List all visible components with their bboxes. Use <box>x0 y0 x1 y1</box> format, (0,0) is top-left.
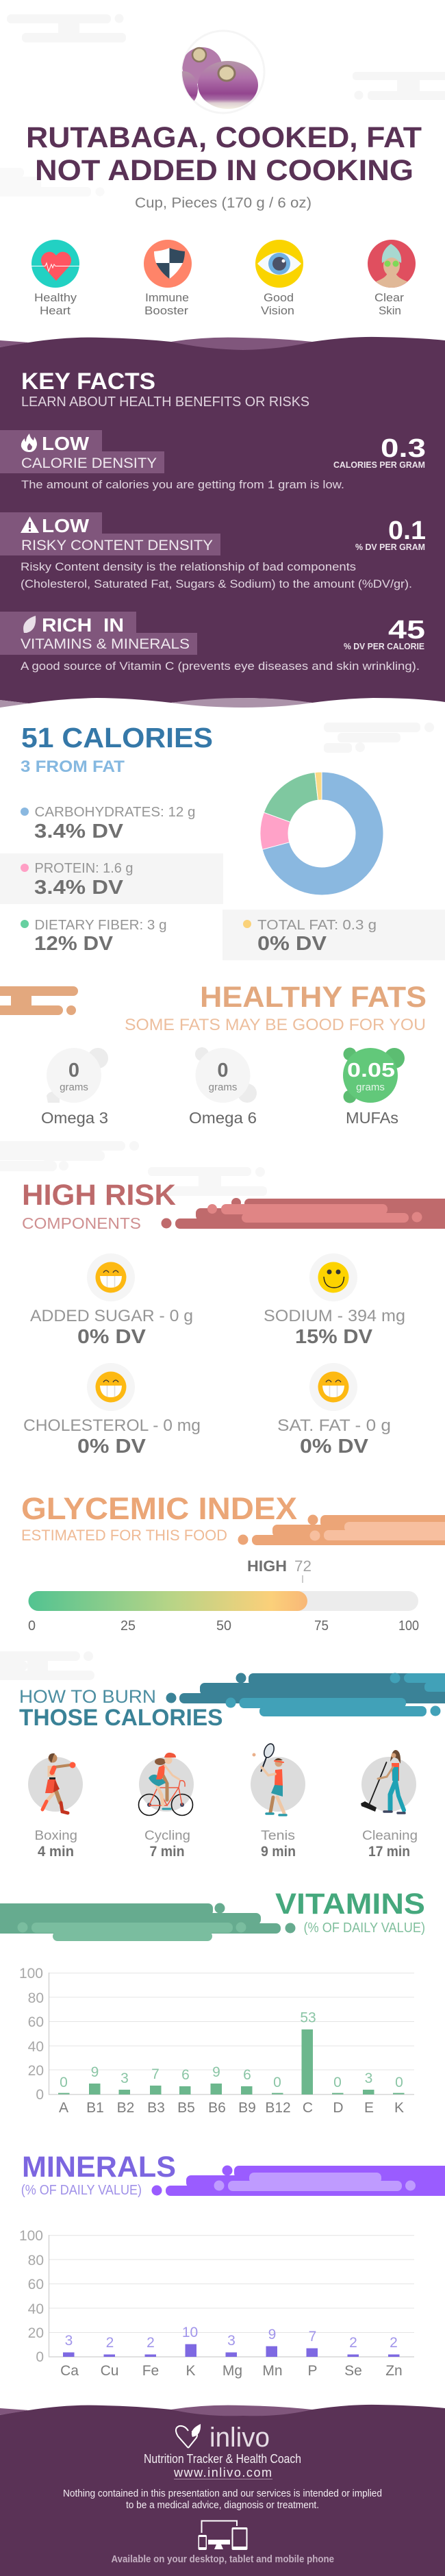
bar chart: vitamins: 3 <box>120 2071 129 2086</box>
icon: eye <box>255 240 303 288</box>
heading: key facts: KEY FACTS <box>21 368 155 395</box>
banner shape: green <box>0 1903 296 1941</box>
bar chart: vitamins: C <box>303 2100 313 2116</box>
benefit: clear skin: Skin <box>379 304 401 317</box>
gauge scale: 0 <box>28 1618 36 1634</box>
panel: key facts <box>0 337 445 708</box>
bar chart: minerals: 10 <box>182 2325 198 2340</box>
risk: cholesterol: 0% DV <box>77 1436 147 1458</box>
serving size: Cup, Pieces (170 g / 6 oz) <box>135 195 312 211</box>
bar chart: vitamins: K <box>394 2100 404 2116</box>
background cloud: burn <box>0 1651 94 1680</box>
icon: grin <box>96 1371 126 1403</box>
icon: shield <box>144 240 192 288</box>
title <box>26 121 422 187</box>
heading: healthy fats: HEALTHY FATS <box>200 981 427 1014</box>
activity: cycling <box>138 1753 194 1860</box>
stat: omega 6: Omega 6 <box>189 1109 257 1127</box>
title: NOT ADDED IN COOKING <box>35 154 414 187</box>
banner shape: teal <box>166 1673 445 1716</box>
bar chart: vitamins: E <box>364 2100 374 2116</box>
benefit: good vision: Vision <box>261 304 294 317</box>
benefit: clear skin <box>368 240 416 317</box>
gauge scale: 100 <box>398 1618 419 1634</box>
fact: risky content density: Risky Content density is the relationship of bad components <box>21 560 356 573</box>
icon: face mask <box>368 240 416 288</box>
fact: risky content density: RISKY CONTENT DENSITY <box>21 538 213 553</box>
panel: how to burn those calories <box>19 1673 445 1860</box>
bar chart: vitamins: 7 <box>151 2066 160 2082</box>
banner shape: purple <box>152 2166 445 2196</box>
legend: protein: PROTEIN: 1.6 g <box>34 861 133 876</box>
activity: cycling: 7 min <box>149 1844 185 1860</box>
stat: omega 3: 0 <box>68 1060 79 1081</box>
heading: HOW TO BURN <box>19 1686 156 1707</box>
bar chart: minerals: 3 <box>227 2333 236 2349</box>
bar chart: minerals: Se <box>344 2363 362 2379</box>
risk: sodium: SODIUM - 394 mg <box>264 1307 405 1325</box>
activity: cleaning: 17 min <box>368 1844 410 1860</box>
bar chart: minerals: 2 <box>147 2335 155 2351</box>
stat: MUFAs <box>343 1048 405 1127</box>
risk: saturated fat: 0% DV <box>300 1436 369 1458</box>
fact: calorie density: The amount of calories you are getting from 1 gram is low. <box>21 478 344 491</box>
background cloud: calories <box>324 723 434 753</box>
gauge scale: 50 <box>216 1618 231 1634</box>
bar chart: minerals <box>19 2228 414 2379</box>
bar chart: minerals: 80 <box>28 2253 44 2268</box>
fact: risky content density: LOW <box>42 515 90 536</box>
risk: sodium <box>264 1253 405 1348</box>
bar chart: minerals: Fe <box>142 2363 159 2379</box>
stat: MUFAs: 0.05 <box>347 1060 395 1081</box>
bar chart: minerals: 20 <box>28 2325 44 2341</box>
bar chart: vitamins: 53 <box>300 2010 316 2026</box>
icon: tennis player <box>252 1742 286 1815</box>
bar chart: vitamins: 40 <box>28 2039 44 2055</box>
bar chart: vitamins: B6 <box>208 2100 226 2116</box>
bar chart: vitamins: D <box>333 2100 344 2116</box>
stat: omega 6: grams <box>209 1081 237 1093</box>
legend: carbohydrates: CARBOHYDRATES: 12 g <box>34 805 196 820</box>
risk: sodium: 15% DV <box>295 1326 373 1348</box>
bar chart: vitamins: 0 <box>60 2075 68 2090</box>
fact: calorie density: 0.3 <box>381 434 426 463</box>
risk: saturated fat: SAT. FAT - 0 g <box>277 1416 391 1435</box>
availability note: Available on your desktop, tablet and mobile phone <box>111 2553 334 2565</box>
bar chart: vitamins: 0 <box>395 2075 403 2090</box>
food photo: rutabaga <box>169 31 264 113</box>
bar chart: minerals: 3 <box>65 2333 73 2349</box>
panel: minerals <box>19 2151 445 2379</box>
legend: total fat <box>243 918 377 955</box>
bar chart: vitamins: 9 <box>91 2064 99 2080</box>
icon: grin <box>318 1371 349 1403</box>
stat: MUFAs: grams <box>356 1081 385 1093</box>
subheading: SOME FATS MAY BE GOOD FOR YOU <box>125 1016 426 1034</box>
icon: person sweeping <box>361 1750 405 1813</box>
bar chart: vitamins: 60 <box>28 2014 44 2030</box>
legend: total fat: 0% DV <box>257 933 327 955</box>
benefit: good vision <box>255 240 303 317</box>
bar chart: vitamins: 0 <box>36 2087 44 2103</box>
benefit: immune booster: Immune <box>145 291 189 304</box>
legend: carbohydrates <box>21 805 196 842</box>
gauge scale <box>28 1618 419 1634</box>
icon: devices <box>199 2521 248 2550</box>
bar chart: minerals: 7 <box>309 2329 316 2344</box>
risk: added sugar <box>30 1253 193 1348</box>
panel: calories <box>0 722 445 960</box>
stat: omega 3 <box>41 1048 108 1127</box>
heading: glycemic index: GLYCEMIC INDEX <box>21 1491 297 1526</box>
bar chart: minerals: Cu <box>101 2363 118 2379</box>
benefit: immune booster: Booster <box>144 304 188 317</box>
fact: rich in vitamins and minerals: A good source of Vitamin C (prevents eye diseases and skin wrinkling). <box>21 660 420 673</box>
panel: vitamins <box>0 1888 425 2116</box>
gauge label: high 72: HIGH <box>247 1558 287 1575</box>
disclaimer: to be a medical advice, diagnosis or treatment. <box>126 2499 319 2511</box>
fact: calorie density: CALORIES PER GRAM <box>333 460 425 470</box>
risk: cholesterol: CHOLESTEROL - 0 mg <box>23 1416 201 1435</box>
bar chart: minerals: 60 <box>28 2277 44 2292</box>
panel: footer <box>0 2405 445 2576</box>
fact: calorie density <box>0 430 426 491</box>
fact: rich in vitamins and minerals: RICH IN <box>42 614 124 636</box>
legend: total fat: TOTAL FAT: 0.3 g <box>257 918 377 933</box>
bar chart: vitamins: B9 <box>238 2100 256 2116</box>
bar chart: minerals: 2 <box>106 2335 114 2351</box>
icon: warning <box>21 516 39 533</box>
activity: boxing: 4 min <box>38 1844 74 1860</box>
bar chart: vitamins: 6 <box>181 2067 190 2083</box>
legend: dietary fiber: 12% DV <box>34 933 114 955</box>
fact: risky content density: % DV PER GRAM <box>355 542 425 552</box>
bar chart: vitamins: B1 <box>86 2100 104 2116</box>
bar chart: minerals: Zn <box>385 2363 403 2379</box>
bar chart: vitamins: B5 <box>177 2100 195 2116</box>
tagline: Nutrition Tracker & Health Coach <box>144 2452 301 2466</box>
legend: dietary fiber <box>21 918 167 955</box>
risk: saturated fat <box>277 1363 391 1458</box>
activity: cleaning: Cleaning <box>362 1829 418 1843</box>
donut chart <box>260 772 383 895</box>
legend: protein <box>21 861 133 899</box>
bar chart: minerals: K <box>186 2363 196 2379</box>
heading: vitamins: VITAMINS <box>275 1888 425 1921</box>
subheading: LEARN ABOUT HEALTH BENEFITS OR RISKS <box>21 395 309 410</box>
panel: healthy fats <box>0 981 427 1127</box>
bar chart: minerals: Ca <box>60 2363 79 2379</box>
icon: grin <box>96 1262 126 1293</box>
bar chart: minerals: 100 <box>19 2228 43 2244</box>
bar chart: minerals: Mg <box>222 2363 242 2379</box>
bar chart: minerals: 9 <box>268 2327 276 2342</box>
fact: risky content density: 0.1 <box>388 516 426 545</box>
banner shape: red <box>162 1198 445 1229</box>
subheading: ESTIMATED FOR THIS FOOD <box>21 1527 227 1544</box>
fact: risky content density <box>0 512 426 590</box>
activity: cleaning <box>361 1750 418 1860</box>
bar chart: vitamins: 9 <box>212 2064 220 2080</box>
bar chart: minerals: Mn <box>262 2363 283 2379</box>
fact: risky content density: (Cholesterol, Saturated Fat, Sugars & Sodium) to the amount (%DV/gr). <box>21 577 412 590</box>
bar chart: vitamins: A <box>59 2100 68 2116</box>
bar chart: vitamins: 80 <box>28 1990 44 2006</box>
panel: glycemic index <box>21 1491 445 1634</box>
bar chart: minerals: 0 <box>36 2349 44 2365</box>
heading: calories: 51 CALORIES <box>21 722 213 753</box>
heading: high risk: HIGH RISK <box>22 1179 176 1212</box>
bar chart: minerals: 40 <box>28 2301 44 2317</box>
activity: boxing <box>28 1753 83 1860</box>
heading: THOSE CALORIES <box>19 1705 223 1731</box>
bar chart: vitamins: 20 <box>28 2063 44 2079</box>
website: www.inlivo.com <box>173 2466 272 2479</box>
bar chart: vitamins: 0 <box>333 2075 342 2090</box>
logo: inlivo heart <box>176 2424 201 2448</box>
subheading: components: COMPONENTS <box>22 1214 141 1232</box>
bar chart: vitamins: 6 <box>243 2067 251 2083</box>
background cloud: top right <box>353 72 445 100</box>
fact: calorie density: LOW <box>42 433 90 454</box>
gauge label: high 72 <box>247 1558 312 1583</box>
activity: tennis: 9 min <box>261 1844 296 1860</box>
icon: heart <box>31 240 79 288</box>
activity: tennis <box>251 1742 305 1860</box>
heading: minerals: MINERALS <box>22 2151 176 2184</box>
icon: cyclist <box>138 1753 193 1815</box>
fact: rich in vitamins and minerals: VITAMINS & MINERALS <box>21 636 190 652</box>
background cloud: high risk <box>0 1141 267 1196</box>
bar chart: vitamins: 0 <box>273 2075 281 2090</box>
gauge scale: 25 <box>120 1618 136 1634</box>
fact: calorie density: CALORIE DENSITY <box>21 455 157 471</box>
gauge scale: 75 <box>314 1618 329 1634</box>
gauge bar <box>29 1591 418 1611</box>
title: RUTABAGA, COOKED, FAT <box>26 121 422 154</box>
bar chart: minerals: P <box>307 2363 318 2379</box>
bar chart: vitamins: 100 <box>19 1966 43 1981</box>
heading <box>19 1686 223 1731</box>
icon: leaf <box>23 616 36 633</box>
icon: boxer <box>42 1753 75 1813</box>
subheading: (% OF DAILY VALUE) <box>304 1921 425 1936</box>
icon: flame <box>21 434 37 452</box>
banner shape: orange <box>238 1515 445 1545</box>
gauge label: high 72: 72 <box>294 1558 312 1575</box>
icon: smile <box>318 1262 349 1293</box>
benefit: healthy heart: Healthy <box>34 291 77 304</box>
background cloud: top left <box>7 14 126 42</box>
fact: rich in vitamins and minerals <box>0 612 425 673</box>
stat: omega 3: grams <box>60 1081 88 1093</box>
risk: added sugar: 0% DV <box>77 1326 147 1348</box>
disclaimer: Nothing contained in this presentation and our services is intended or implied <box>63 2488 382 2499</box>
row background: total fat <box>222 910 445 960</box>
benefit: healthy heart <box>31 240 79 317</box>
stat: omega 3: Omega 3 <box>41 1109 108 1127</box>
stat: omega 6: 0 <box>217 1060 229 1081</box>
bar chart: vitamins: B12 <box>265 2100 291 2116</box>
panel: high risk <box>22 1179 445 1458</box>
legend: protein: 3.4% DV <box>34 877 124 899</box>
benefit: immune booster <box>144 240 192 317</box>
legend: carbohydrates: 3.4% DV <box>34 821 124 842</box>
banner shape: orange <box>0 986 78 1015</box>
bar chart: vitamins: 3 <box>365 2071 372 2086</box>
legend: dietary fiber: DIETARY FIBER: 3 g <box>34 918 167 933</box>
fact: rich in vitamins and minerals: % DV PER CALORIE <box>344 642 424 651</box>
benefit: clear skin: Clear <box>374 291 404 304</box>
benefit: healthy heart: Heart <box>40 304 71 317</box>
bar chart: vitamins <box>19 1966 414 2116</box>
subheading: from fat: 3 FROM FAT <box>21 758 125 776</box>
bar chart: vitamins: B2 <box>117 2100 134 2116</box>
stat: omega 6 <box>189 1047 257 1127</box>
benefit: good vision: Good <box>264 291 294 304</box>
activity: tennis: Tenis <box>261 1829 295 1843</box>
risk: cholesterol <box>23 1363 201 1458</box>
bar chart: minerals: 2 <box>390 2335 398 2351</box>
background cloud: title left <box>0 168 104 197</box>
bar chart: vitamins: B3 <box>147 2100 165 2116</box>
risk: added sugar: ADDED SUGAR - 0 g <box>30 1307 193 1325</box>
activity: boxing: Boxing <box>34 1829 77 1843</box>
fact: rich in vitamins and minerals: 45 <box>388 616 425 645</box>
disclaimer <box>63 2488 382 2511</box>
row background: protein <box>0 853 223 904</box>
subheading: (% OF DAILY VALUE) <box>21 2183 142 2198</box>
logo text: inlivo <box>209 2423 270 2453</box>
stat: MUFAs: MUFAs <box>346 1109 398 1127</box>
bar chart: minerals: 2 <box>349 2335 357 2351</box>
activity: cycling: Cycling <box>144 1829 190 1843</box>
